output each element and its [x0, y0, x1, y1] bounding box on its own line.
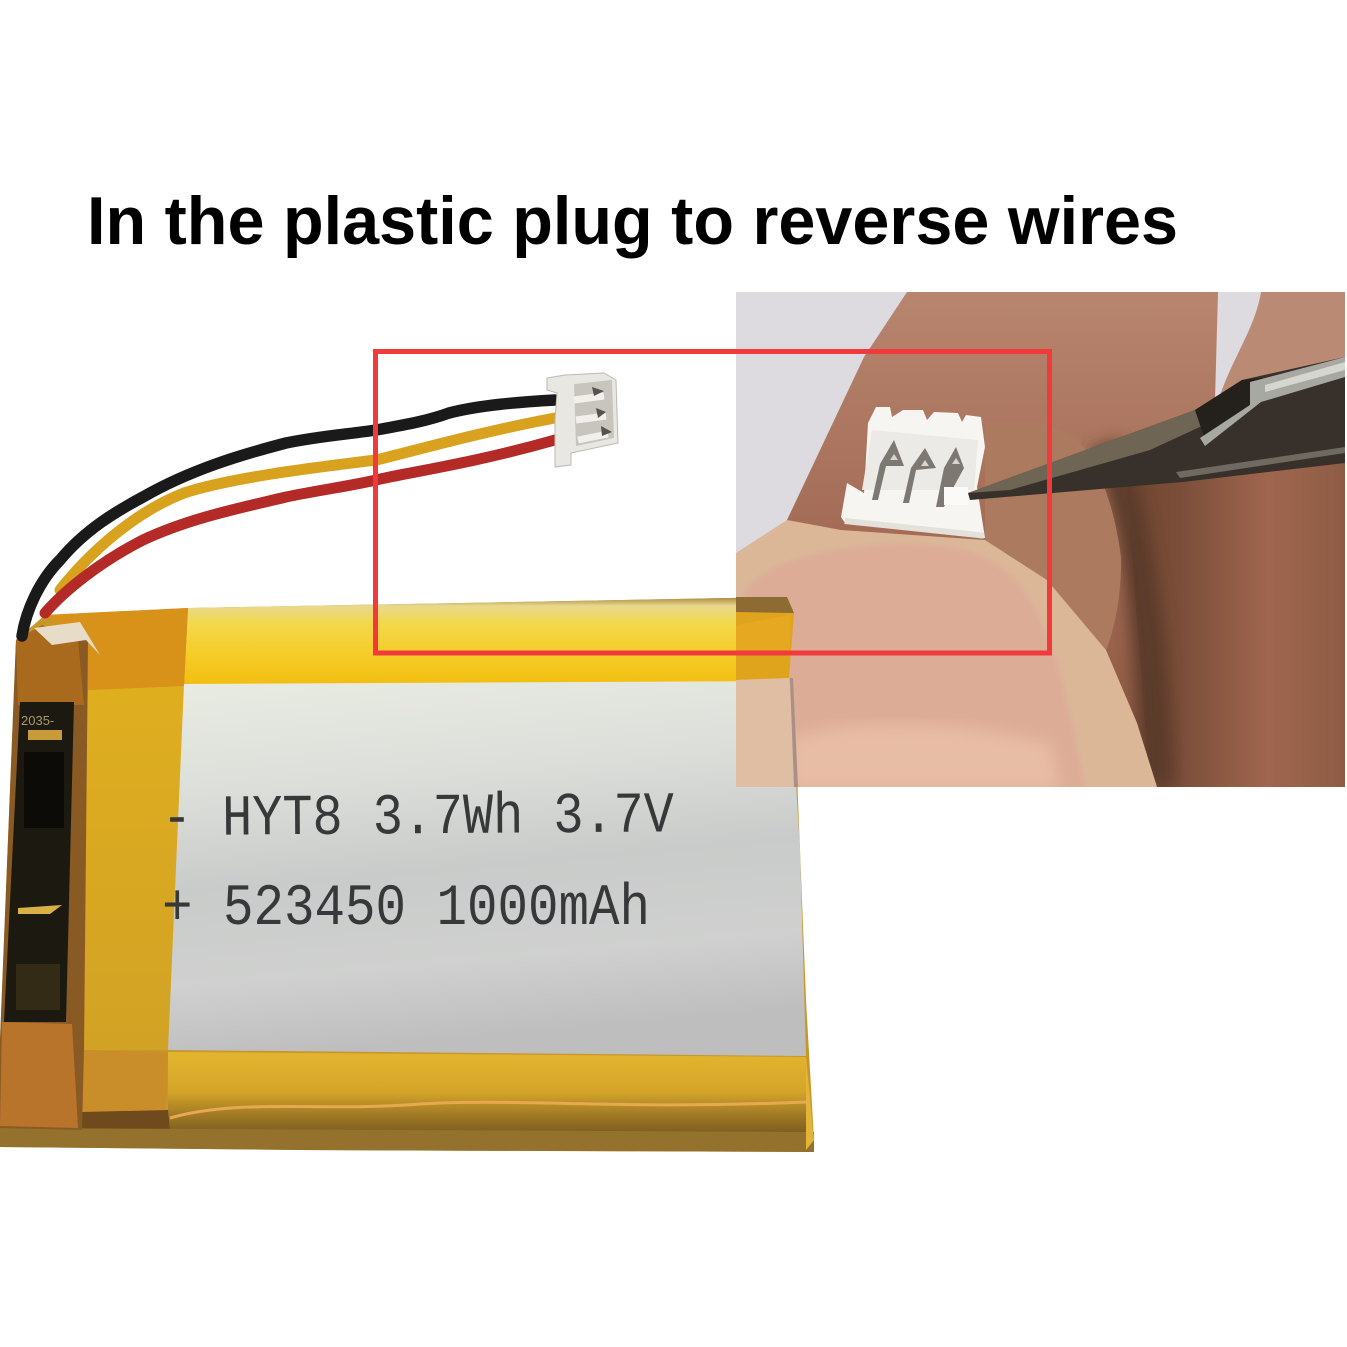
battery silver label panel: [168, 681, 806, 1056]
battery top yellow band: [184, 597, 790, 686]
battery corner showing through inset: [736, 597, 798, 787]
connector pins: [872, 440, 964, 507]
left protection circuit strip: [0, 625, 88, 1130]
red highlight rectangle: [376, 352, 1050, 653]
battery photo: [0, 597, 814, 1152]
wall background: [736, 292, 1345, 787]
bottom lower-left orange block: [80, 1050, 168, 1112]
index finger: [780, 292, 1345, 787]
battery bottom lip: [0, 1128, 814, 1152]
battery top-left orange corner: [45, 608, 188, 690]
inset photo: fingers holding connector: [736, 292, 1345, 790]
yellow wire: [60, 418, 555, 590]
tweezers: [968, 357, 1345, 500]
title: In the plastic plug to reverse wires: [87, 183, 1178, 259]
left protection circuit strip: 2035-: [21, 713, 54, 728]
printed text line 1: - HYT8 3.7Wh 3.7V: [162, 784, 674, 853]
shadow between fingers: [1090, 440, 1175, 787]
red wire: [45, 440, 555, 613]
thumb skin: [736, 520, 1158, 790]
battery left amber strip: [80, 686, 184, 1050]
printed text line 2: + 523450 1000mAh: [162, 877, 650, 942]
battery body: amber film: [0, 597, 814, 1152]
upper right finger: [1215, 292, 1345, 410]
battery bottom amber band: [168, 1052, 814, 1140]
black wire: [22, 400, 555, 636]
bottom glue line: [170, 1102, 806, 1118]
white tape at wire exit: [34, 622, 100, 655]
large connector: [841, 407, 985, 539]
right finger: [1125, 440, 1345, 787]
thumb nail: [743, 544, 1086, 790]
nail tip highlight: [790, 725, 1060, 790]
wires: [22, 400, 555, 636]
small connector: [547, 373, 618, 467]
fingertip: [985, 420, 1121, 650]
